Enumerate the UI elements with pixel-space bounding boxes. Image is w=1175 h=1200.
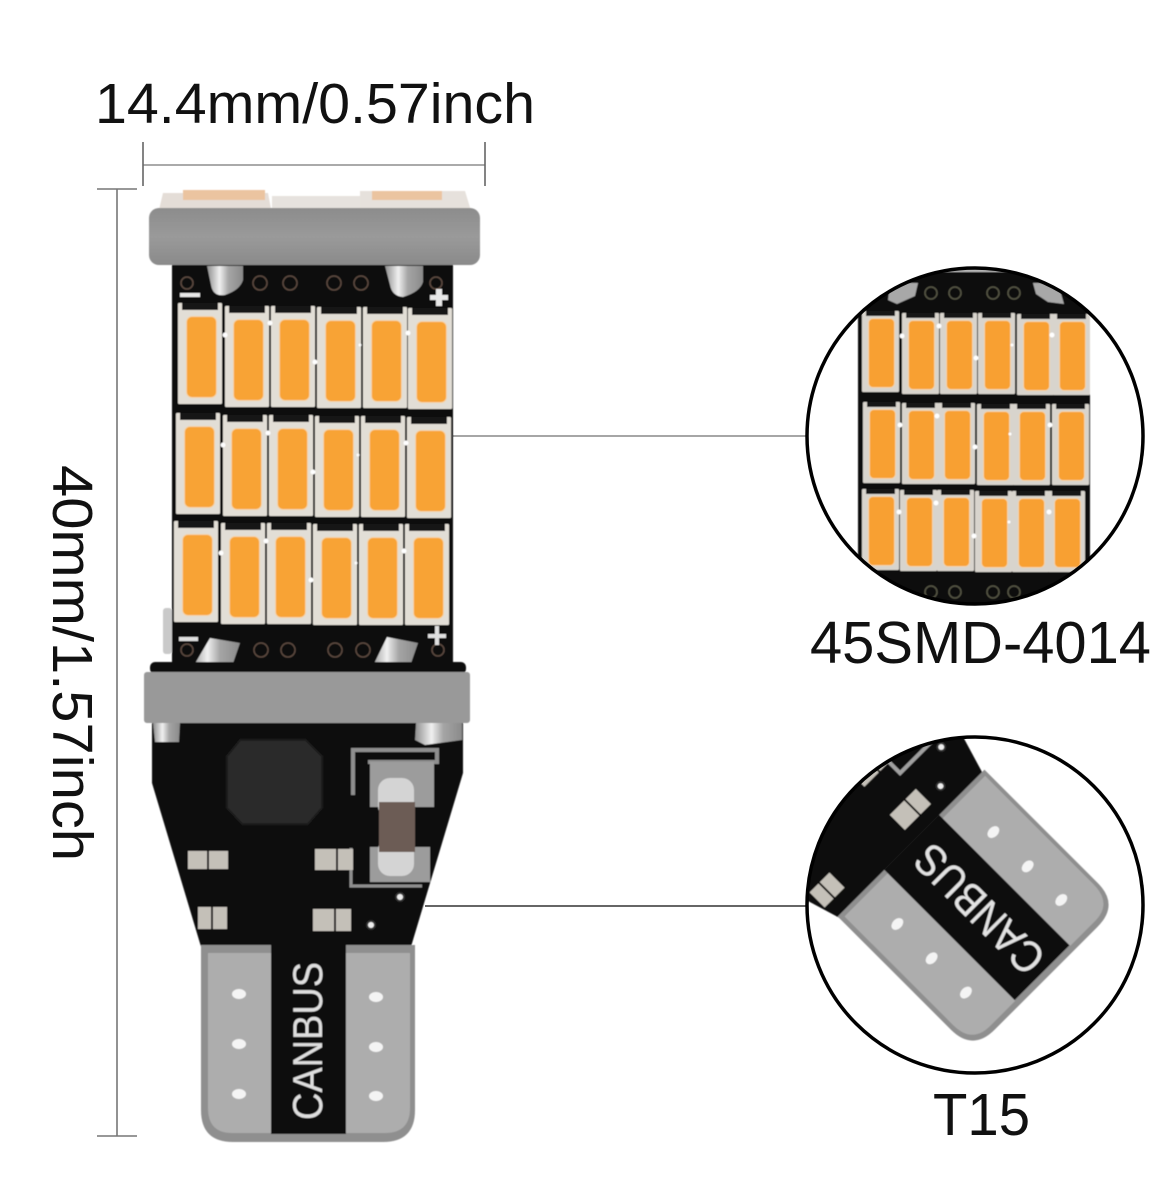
solder dots between LEDs [218, 320, 410, 582]
lower gray retaining band [144, 662, 470, 723]
width dimension bracket [143, 142, 485, 186]
upper metal tabs [207, 266, 423, 297]
pin holes [232, 989, 383, 1101]
bulb tip: side LEDs seen from top [158, 190, 472, 214]
lower trace [351, 848, 422, 886]
callout line: LED panel [453, 435, 806, 437]
driver board [152, 723, 463, 950]
CANBUS label: CANBUS [284, 962, 331, 1120]
polarity marks bottom [179, 626, 446, 645]
LED bulb [144, 190, 480, 1142]
upper gray retaining band [149, 208, 480, 265]
vias [367, 893, 404, 929]
lower solder holes [181, 643, 444, 657]
callout line: T15 base [425, 905, 806, 907]
zoomed solder dots [896, 324, 1054, 538]
T15 base [201, 945, 415, 1142]
small solder pads [188, 849, 353, 931]
LED row 3 [174, 521, 449, 625]
label: base type: T15 [933, 1082, 1030, 1148]
capacitor [378, 778, 415, 876]
zoom circle: LED panel [800, 260, 1150, 610]
width dimension label: 14.4mm/0.57inch [95, 72, 535, 136]
LED row 2 [176, 413, 451, 518]
circle outline [807, 268, 1143, 604]
copper pads [370, 762, 434, 882]
height dimension label: 40mm/1.57inch [40, 465, 104, 861]
driver board tabs [153, 723, 462, 745]
circle outline [807, 737, 1143, 1073]
zoom circle: T15 base: CANBUS [905, 834, 1055, 983]
side bracket [163, 608, 172, 654]
polarity marks top [180, 289, 448, 306]
label: LED type: 45SMD-4014 [810, 610, 1151, 676]
lower metal tabs [190, 637, 418, 672]
upper solder holes [181, 276, 442, 290]
silkscreen trace [353, 750, 437, 795]
height dimension bracket [97, 189, 137, 1136]
zoom circle: T15 base [805, 735, 1145, 1075]
zoomed LED rows [862, 311, 1090, 572]
inductor [227, 740, 322, 824]
LED row 1 [178, 303, 452, 409]
upper circuit board [172, 265, 453, 675]
